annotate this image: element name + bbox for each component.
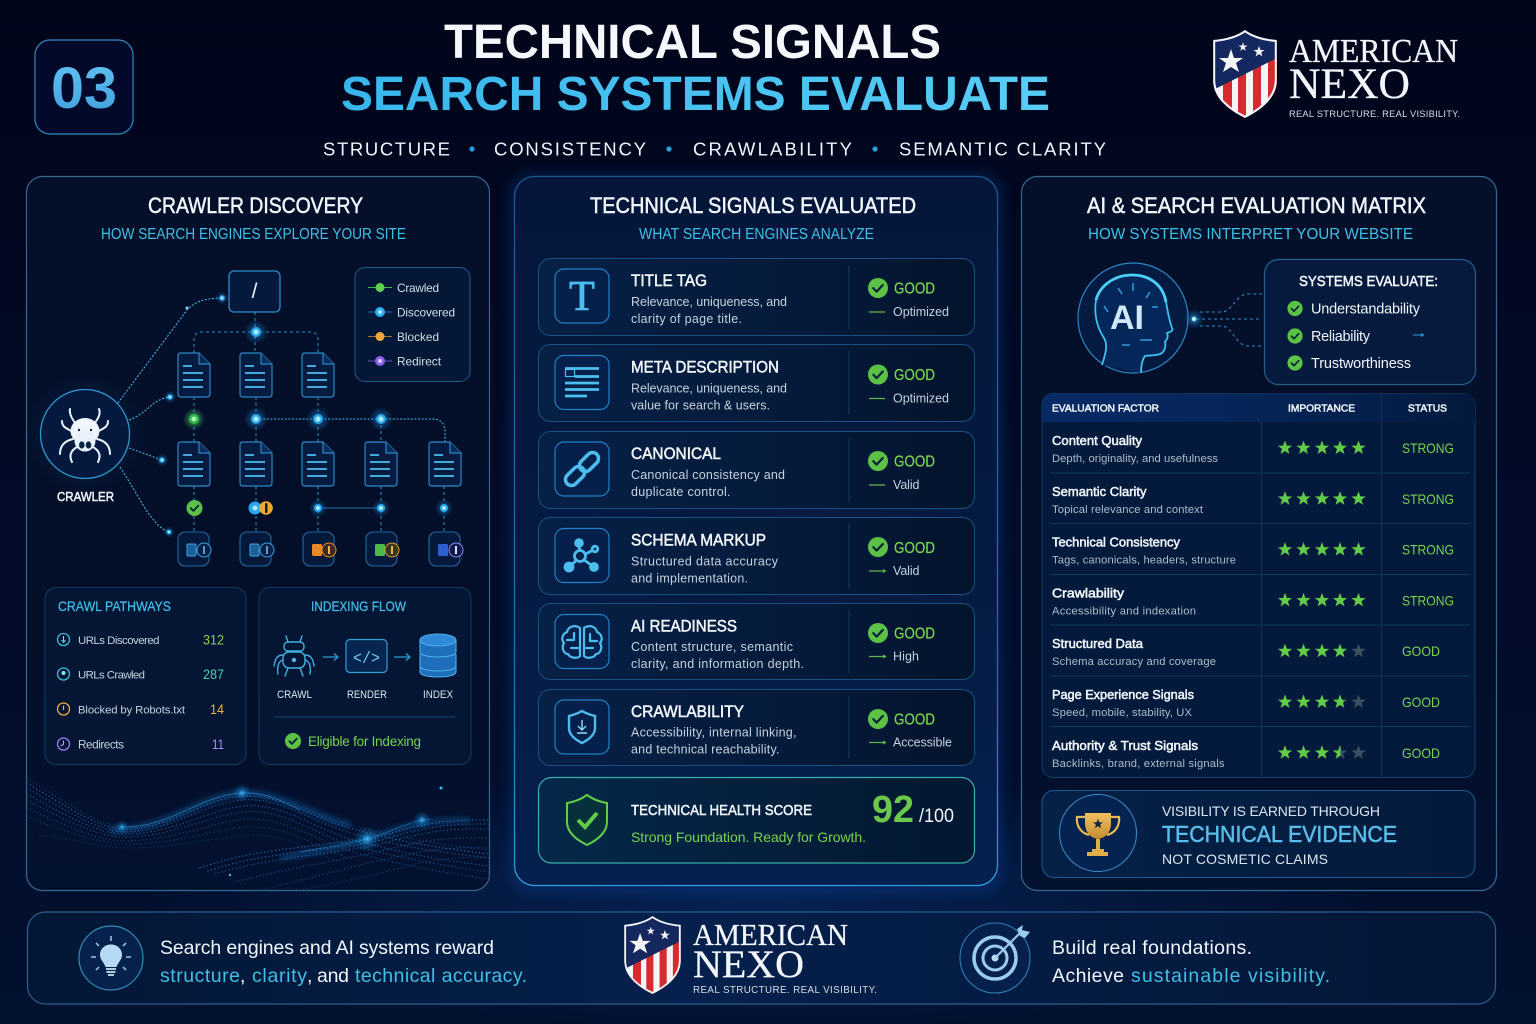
signal card: schema markup: [538, 518, 974, 594]
flow step labels: INDEX: [423, 689, 454, 701]
page documents row 1: [178, 353, 334, 397]
signal card: canonical: CANONICAL: [631, 445, 721, 463]
row: crawlability: Accessibility and indexation: [1052, 605, 1196, 617]
signal card: title tag: Optimized: [893, 305, 949, 319]
signal card: title tag: TITLE TAG: [631, 272, 707, 290]
crawl tree connectors: [118, 298, 445, 533]
connectors: ai to systems: [1196, 294, 1262, 346]
signal card: schema markup: Structured data accuracy: [631, 554, 779, 568]
signal card: crawlability: [538, 690, 974, 766]
row: urls discovered: URLs Discovered: [78, 635, 160, 647]
row: technical consistency: [1052, 536, 1454, 567]
signal card: meta description: GOOD: [894, 367, 935, 384]
row: crawlability: [1052, 586, 1454, 617]
row: semantic clarity: STRONG: [1402, 491, 1454, 507]
signal card: canonical: duplicate control.: [631, 485, 730, 499]
message: left: and: [317, 965, 349, 987]
signal card: ai readiness: Content structure, semantic: [631, 640, 793, 654]
flow step labels: RENDER: [347, 689, 387, 701]
systems evaluate box: [1264, 260, 1476, 384]
row: technical consistency: Technical Consistency: [1052, 536, 1181, 550]
signal card: title tag: [538, 258, 974, 336]
page documents row 2: [178, 442, 461, 486]
signal card: canonical: GOOD: [894, 454, 935, 470]
row: crawlability: Crawlability: [1052, 586, 1125, 600]
icon: render code: [346, 640, 387, 672]
row: urls crawled: 287: [203, 666, 224, 682]
logo: American Nexo header: [1213, 30, 1460, 120]
row: redirects: 11: [212, 736, 224, 752]
legend: Crawled: [397, 281, 439, 295]
subtitle keywords: CONSISTENCY: [494, 138, 646, 160]
icon: ai head: AI: [1110, 299, 1144, 337]
row: technical consistency: Tags, canonicals, headers, structure: [1052, 555, 1236, 567]
message: right: sustainable visibility.: [1131, 965, 1330, 987]
subtitle keywords: STRUCTURE: [323, 138, 450, 160]
decorative data wave: [27, 778, 489, 890]
icon: ai head: [1078, 263, 1204, 373]
signal card: schema markup: Valid: [893, 564, 920, 578]
row: technical consistency: STRONG: [1402, 542, 1454, 558]
signal card: schema markup: and implementation.: [631, 572, 748, 586]
message: right: [1052, 937, 1330, 987]
row: redirects: [58, 736, 224, 752]
signal card: crawlability: Accessibility, internal linking,: [631, 726, 796, 740]
row: page experience signals: GOOD: [1402, 694, 1440, 710]
signal card: title tag: T: [569, 274, 595, 320]
signal card: crawlability: CRAWLABILITY: [631, 703, 744, 721]
row: structured data: GOOD: [1402, 643, 1440, 659]
subtitle keywords: [323, 138, 1106, 160]
signal card: ai readiness: AI READINESS: [631, 618, 737, 636]
signal card: crawlability: and technical reachability.: [631, 742, 780, 756]
signal card: meta description: value for search & users.: [631, 398, 770, 412]
row: authority and trust signals: GOOD: [1402, 745, 1440, 761]
panel: indexing flow: [259, 588, 471, 764]
legend: Discovered: [397, 306, 455, 320]
message: right: Build real foundations.: [1052, 937, 1252, 959]
title: [341, 16, 1050, 121]
icon: lightbulb: [79, 926, 143, 990]
row: semantic clarity: Semantic Clarity: [1052, 485, 1147, 499]
systems evaluate box: Reliability: [1311, 329, 1371, 345]
row: content quality: STRONG: [1402, 440, 1454, 456]
subheading: technical signals: WHAT SEARCH ENGINES ANALYZE: [639, 226, 874, 243]
row: urls discovered: [58, 632, 224, 648]
row: urls crawled: [58, 666, 224, 682]
signal card: meta description: [538, 344, 974, 422]
technical health score: TECHNICAL HEALTH SCORE: [631, 803, 812, 819]
signal card: ai readiness: GOOD: [894, 626, 935, 642]
message: left: technical accuracy.: [355, 965, 527, 987]
icon: trophy: [1060, 794, 1136, 872]
signal card: meta description: META DESCRIPTION: [631, 358, 779, 376]
subheading: evaluation matrix: HOW SYSTEMS INTERPRET YOUR WEBSITE: [1088, 226, 1413, 243]
row: authority and trust signals: Authority & Trust Signals: [1052, 739, 1198, 753]
title: SEARCH SYSTEMS EVALUATE: [341, 68, 1050, 121]
signal card: canonical: Canonical consistency and: [631, 468, 785, 482]
row: structured data: Structured Data: [1052, 637, 1143, 651]
message: right: Achieve: [1052, 965, 1124, 987]
logo: American Nexo footer: REAL STRUCTURE. REAL VISIBILITY.: [693, 985, 877, 996]
table header: IMPORTANCE: [1288, 402, 1355, 414]
technical health score: [538, 778, 974, 863]
signal card: ai readiness: clarity, and information depth.: [631, 657, 804, 671]
row: redirects: Redirects: [78, 738, 124, 752]
row: urls discovered: 312: [203, 632, 224, 648]
legend: [355, 268, 470, 382]
logo: American Nexo footer: [624, 916, 877, 996]
signal card: schema markup: SCHEMA MARKUP: [631, 532, 766, 550]
message: left: clarity: [252, 965, 307, 987]
subtitle keywords: SEMANTIC CLARITY: [899, 138, 1106, 160]
row: authority and trust signals: Backlinks, brand, external signals: [1052, 758, 1225, 770]
logo: American Nexo header: AMERICAN: [1289, 33, 1458, 70]
logo: American Nexo header: NEXO: [1289, 61, 1410, 108]
discovery pulse nodes: [156, 292, 453, 537]
heading: technical signals: TECHNICAL SIGNALS EVALUATED: [590, 193, 916, 218]
subheading: crawler discovery: HOW SEARCH ENGINES EXPLORE YOUR SITE: [101, 226, 406, 243]
message: left: [160, 937, 527, 987]
logo: American Nexo header: REAL STRUCTURE. REAL VISIBILITY.: [1289, 109, 1460, 119]
panel: ai and search evaluation matrix: [1022, 176, 1496, 890]
row: page experience signals: Speed, mobile, stability, UX: [1052, 707, 1193, 719]
row: blocked by robots: Blocked by Robots.txt: [78, 704, 186, 716]
systems evaluate box: Trustworthiness: [1311, 356, 1411, 372]
heading: crawl pathways: CRAWL PATHWAYS: [58, 598, 171, 614]
callout: technical evidence: TECHNICAL EVIDENCE: [1162, 821, 1397, 847]
panel: technical signals evaluated: [508, 172, 1004, 894]
flow step labels: [277, 689, 454, 701]
evaluation table: [1042, 394, 1475, 778]
systems evaluate box: SYSTEMS EVALUATE:: [1299, 274, 1438, 290]
technical health score: /100: [919, 806, 954, 827]
root page node: [229, 271, 280, 312]
title: TECHNICAL SIGNALS: [444, 16, 941, 69]
message: left: structure: [160, 965, 240, 987]
flow step labels: CRAWL: [277, 689, 312, 701]
message: left: Search engines and AI systems reward: [160, 937, 494, 959]
subtitle keywords: CRAWLABILITY: [693, 138, 852, 160]
callout: technical evidence: [1042, 790, 1475, 878]
row: content quality: Depth, originality, and usefulness: [1052, 453, 1218, 465]
signal card: meta description: Optimized: [893, 392, 949, 406]
signal card: ai readiness: High: [893, 650, 919, 664]
eligible for indexing status: Eligible for Indexing: [308, 734, 421, 749]
heading: crawler discovery: CRAWLER DISCOVERY: [148, 193, 363, 218]
row: crawlability: STRONG: [1402, 592, 1454, 608]
systems evaluate box: Understandability: [1311, 302, 1421, 318]
row: urls crawled: URLs Crawled: [78, 670, 145, 682]
row: semantic clarity: Topical relevance and context: [1052, 504, 1204, 516]
table header: [1042, 394, 1475, 422]
legend: Blocked: [397, 330, 439, 344]
signal card: ai readiness: [538, 604, 974, 680]
section number badge: 03: [51, 56, 117, 121]
row: content quality: [1052, 434, 1454, 465]
row: structured data: [1052, 637, 1440, 668]
technical health score: Strong Foundation. Ready for Growth.: [631, 829, 866, 845]
arrow: crawl to render: [323, 654, 338, 660]
icon: index database: [420, 634, 456, 677]
signal card: crawlability: GOOD: [894, 712, 935, 728]
row: page experience signals: Page Experience Signals: [1052, 688, 1194, 702]
signal card: title tag: Relevance, uniqueness, and: [631, 295, 787, 309]
technical health score: 92: [872, 789, 914, 831]
row: content quality: Content Quality: [1052, 434, 1143, 448]
url resource boxes: [178, 532, 463, 566]
panel: crawl pathways: [45, 588, 246, 764]
panel: crawler discovery: [23, 176, 490, 890]
row: blocked by robots: 14: [210, 701, 224, 717]
heading: evaluation matrix: AI & SEARCH EVALUATION MATRIX: [1087, 193, 1426, 218]
logo: American Nexo footer: AMERICAN: [693, 917, 848, 952]
row: structured data: Schema accuracy and coverage: [1052, 656, 1216, 668]
root page node: /: [252, 280, 258, 303]
callout: technical evidence: VISIBILITY IS EARNED THROUGH: [1162, 803, 1380, 819]
legend: Redirect: [397, 354, 442, 368]
icon: crawl robot: [274, 636, 314, 676]
callout: technical evidence: NOT COSMETIC CLAIMS: [1162, 851, 1328, 867]
message: left: ,: [240, 965, 245, 987]
row: blocked by robots: [58, 701, 224, 717]
icon: render code: </>: [353, 650, 380, 669]
table header: STATUS: [1408, 402, 1447, 414]
signal card: title tag: GOOD: [894, 280, 935, 298]
signal card: canonical: [538, 432, 974, 508]
row: page experience signals: [1052, 688, 1440, 719]
footer banner: [28, 912, 1496, 1004]
row: semantic clarity: [1052, 485, 1454, 516]
signal card: meta description: Relevance, uniqueness, and: [631, 382, 787, 396]
section number badge: [35, 40, 133, 134]
table header: EVALUATION FACTOR: [1052, 402, 1159, 414]
crawler label: CRAWLER: [57, 489, 114, 504]
status icons row: [186, 500, 273, 516]
icon: green shield: [567, 795, 607, 845]
message: left: ,: [307, 965, 312, 987]
heading: indexing flow: INDEXING FLOW: [311, 598, 407, 614]
signal card: crawlability: Accessible: [893, 736, 952, 750]
signal card: schema markup: GOOD: [894, 540, 935, 557]
signal card: canonical: Valid: [893, 478, 920, 492]
icon: target: [960, 923, 1030, 993]
signal card: title tag: clarity of page title.: [631, 312, 742, 326]
row: authority and trust signals: [1052, 739, 1440, 770]
arrow: render to index: [394, 654, 410, 660]
logo: American Nexo footer: NEXO: [693, 943, 804, 986]
icon: crawler spider: [23, 372, 147, 496]
